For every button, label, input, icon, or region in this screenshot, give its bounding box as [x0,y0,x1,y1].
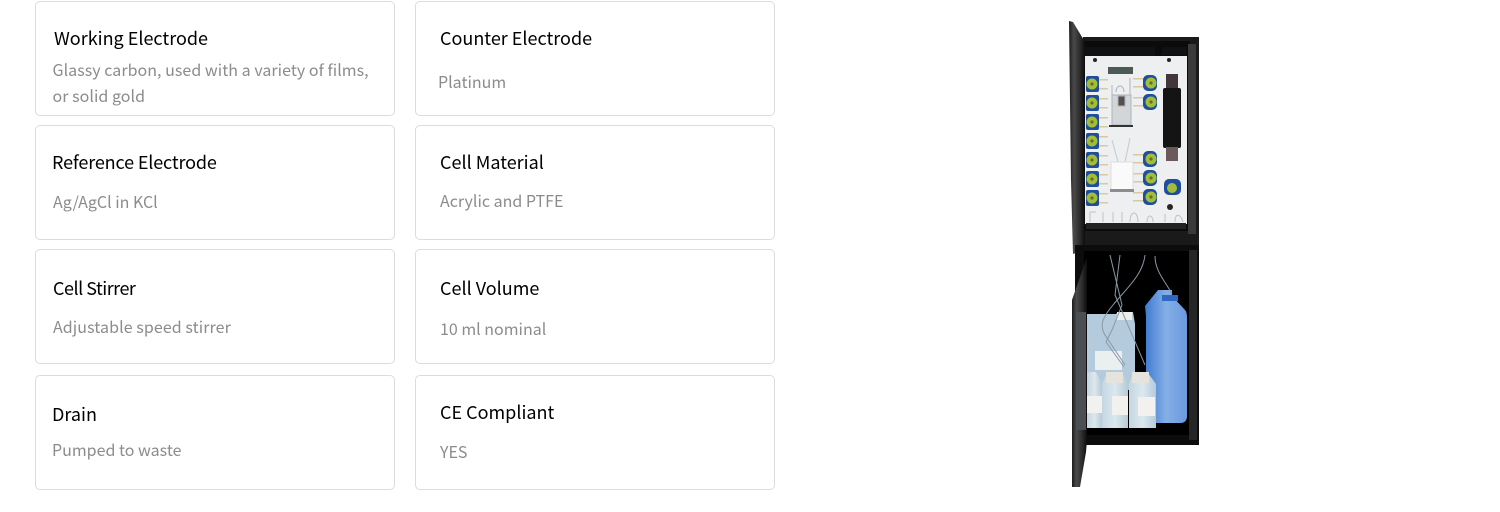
black column [1163,74,1181,161]
panel: cell material [415,125,775,240]
heading: counter electrode: Counter Electrode [440,25,592,51]
clear jerrycan [1086,312,1135,390]
heading: cell stirrer: Cell Stirrer [53,275,135,301]
lower cabinet [1075,245,1199,445]
blue canister [1145,290,1187,423]
upper door [1069,21,1085,254]
display [1108,67,1133,74]
text: drain description: Pumped to waste [52,437,181,461]
text: working electrode description: Glassy carbon, used with a variety of films, [52,57,369,81]
panel: cell volume [415,249,775,364]
heading: reference electrode: Reference Electrode [52,149,217,175]
text: cell material description: Acrylic and PTFE [440,188,563,212]
white vessel [1110,138,1134,192]
text: counter electrode description: Platinum [438,69,506,93]
text: cell volume description: 10 ml nominal [440,316,546,340]
lower door [1072,257,1087,487]
lower right pump [1164,179,1181,195]
panel: counter electrode [415,1,775,116]
panel: CE compliant [415,375,775,490]
panel: reference electrode [35,125,395,240]
white mounting panel [1085,56,1187,224]
tubing fittings [1090,204,1183,222]
reagent bottles [1087,372,1156,428]
text: reference electrode description: Ag/AgCl in KCl [53,189,158,213]
text: CE compliant description: YES [440,439,467,463]
heading: working electrode: Working Electrode [54,25,208,51]
panel: drain [35,375,395,490]
heading: drain: Drain [52,401,97,427]
glass cell [1109,78,1133,126]
panel: working electrode [35,1,395,116]
right pumps [1133,75,1157,205]
upper cabinet [1083,37,1199,245]
text: cell stirrer description: Adjustable speed stirrer [53,314,231,338]
heading: cell material: Cell Material [440,149,544,175]
tubing [1102,255,1172,367]
panel: cell stirrer [35,249,395,364]
left pumps [1086,76,1108,206]
heading: CE compliant: CE Compliant [440,399,554,425]
text: working electrode description [52,57,369,107]
text: working electrode description: or solid gold [52,83,145,107]
heading: cell volume: Cell Volume [440,275,539,301]
